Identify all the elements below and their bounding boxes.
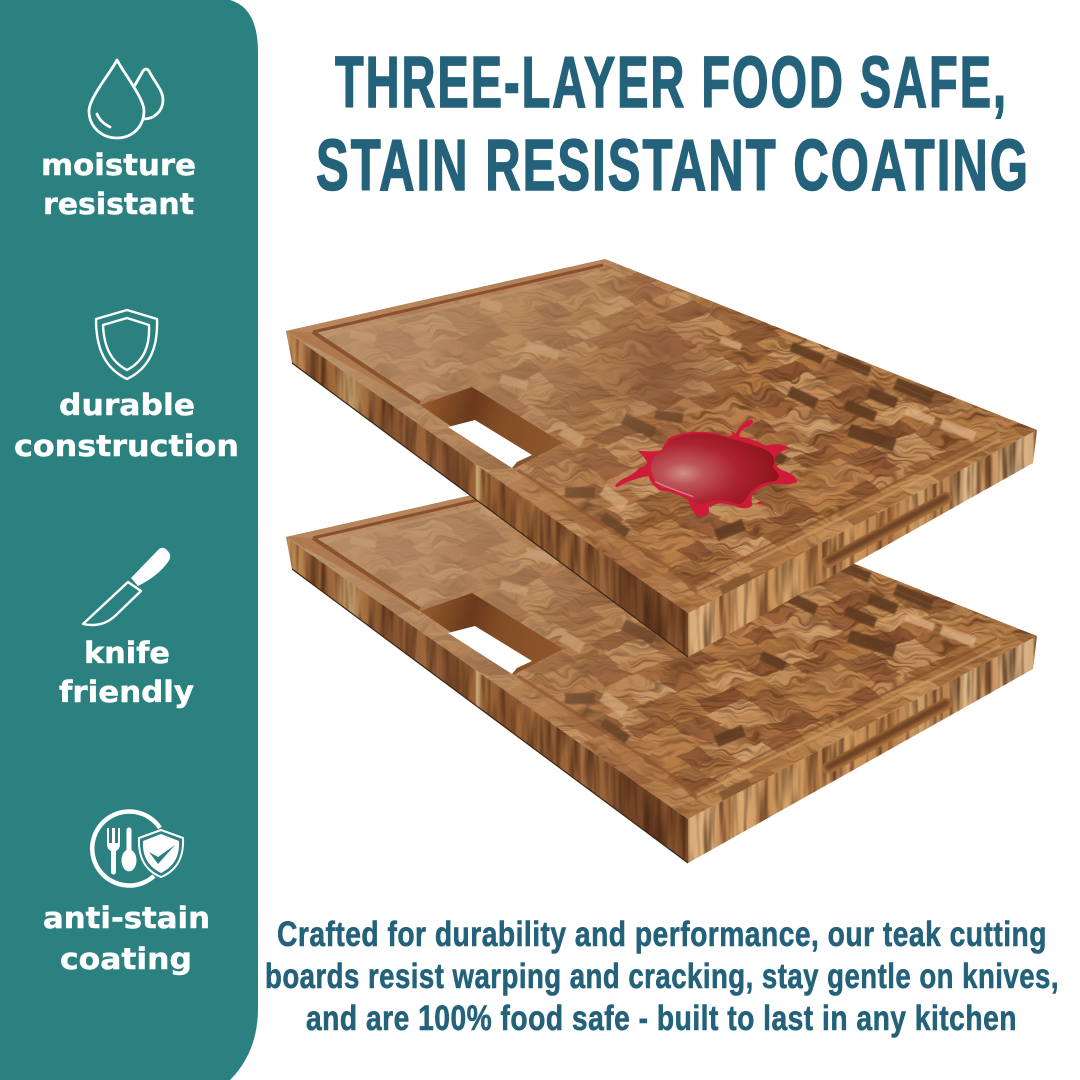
label: anti-stain coating: anti-stain [43,901,210,935]
label: anti-stain coating: coating [60,942,192,976]
title [316,43,1030,206]
label: knife friendly: friendly [59,675,194,709]
label: durable construction: construction [14,429,239,463]
label: durable construction: durable [59,388,195,422]
label: durable construction [14,388,239,463]
icon: plate and shield check [92,812,183,886]
label: knife friendly: knife [84,636,170,670]
icon: shield [96,310,157,379]
red stain splash [615,419,797,517]
label: knife friendly [59,636,194,709]
upper cutting board with stain [200,200,1080,720]
icon: water drops [89,60,163,138]
label: anti-stain coating [43,901,210,976]
label: moisture resistant: resistant [43,187,194,221]
icon: knife [83,548,170,625]
label: moisture resistant: moisture [41,148,196,182]
panel: teal sidebar [0,0,258,1080]
body text [265,915,1059,1038]
label: moisture resistant [41,148,196,221]
lower cutting board [200,406,1080,926]
